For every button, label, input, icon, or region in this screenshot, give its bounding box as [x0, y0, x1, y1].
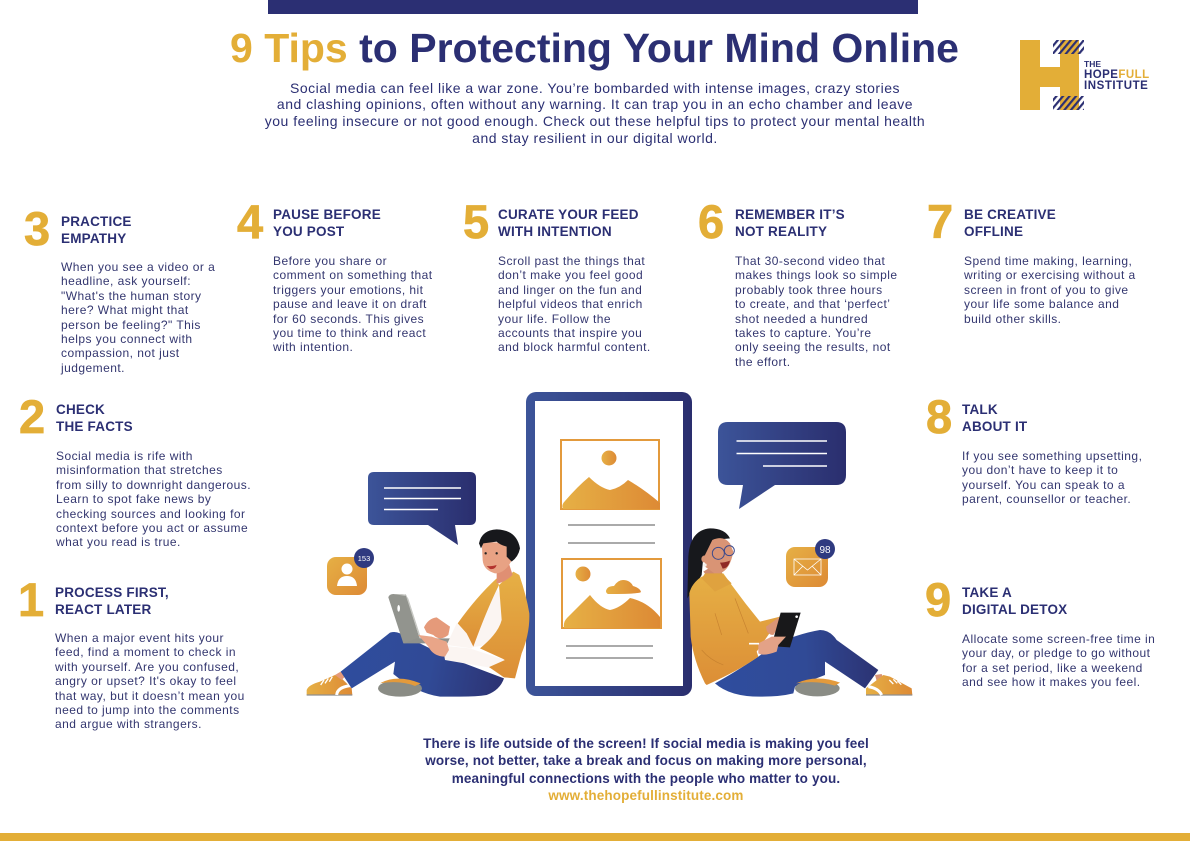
man with laptop — [307, 529, 529, 697]
heading 7 — [964, 207, 1056, 239]
logo: INSTITUTE — [1084, 80, 1148, 92]
heading 7: OFFLINE — [964, 224, 1023, 239]
body 8: yourself. You can speak to a — [962, 478, 1125, 492]
body 5: Scroll past the things that — [498, 254, 645, 268]
icon: profile notification — [327, 548, 374, 595]
bottom bar — [0, 833, 1190, 841]
body 1: need to jump into the comments — [55, 703, 240, 717]
heading 9 — [962, 585, 1067, 617]
number 5: 5 — [463, 195, 489, 248]
body 3: When you see a video or a — [61, 260, 215, 274]
heading 9: DIGITAL DETOX — [962, 602, 1067, 617]
body 6: the effort. — [735, 355, 791, 369]
body 3: helps you connect with — [61, 332, 193, 346]
body 7: build other skills. — [964, 312, 1061, 326]
heading 8: TALK — [962, 402, 998, 417]
body 5 — [498, 254, 651, 354]
closing message: worse, not better, take a break and focus on making more personal, — [425, 753, 867, 768]
heading 6: REMEMBER IT’S — [735, 207, 845, 222]
body 9: and see how it makes you feel. — [962, 675, 1141, 689]
heading 7: BE CREATIVE — [964, 207, 1056, 222]
logo: HOPEFULL — [1084, 69, 1150, 81]
body 2: from silly to downright dangerous. — [56, 478, 251, 492]
body 9: for a set period, like a weekend — [962, 661, 1143, 675]
number 1: 1 — [18, 573, 44, 626]
body 8: you don’t have to keep it to — [962, 463, 1118, 477]
body 2: misinformation that stretches — [56, 463, 223, 477]
body 5: don’t make you feel good — [498, 268, 643, 282]
body 1: feed, find a moment to check in — [55, 645, 236, 659]
number 3: 3 — [24, 202, 50, 255]
tip 7 — [927, 195, 1136, 326]
body 5: accounts that inspire you — [498, 326, 642, 340]
body 4: comment on something that — [273, 268, 433, 282]
body 3: here? What might that — [61, 303, 189, 317]
top bar — [268, 0, 918, 14]
number 4: 4 — [237, 195, 263, 248]
body 7: Spend time making, learning, — [964, 254, 1132, 268]
tip 4 — [237, 195, 433, 354]
body 1 — [55, 631, 245, 731]
tip 5 — [463, 195, 651, 354]
heading 8: ABOUT IT — [962, 419, 1027, 434]
heading 3 — [61, 214, 132, 246]
closing message — [423, 736, 869, 803]
heading 1: REACT LATER — [55, 602, 151, 617]
heading 4: PAUSE BEFORE — [273, 207, 381, 222]
body 6 — [735, 254, 897, 369]
body 6: to create, and that ‘perfect’ — [735, 297, 890, 311]
body 6: takes to capture. You’re — [735, 326, 871, 340]
heading 2: THE FACTS — [56, 419, 133, 434]
body 5: your life. Follow the — [498, 312, 611, 326]
body 2: Learn to spot fake news by — [56, 492, 211, 506]
logo: THE — [1084, 59, 1101, 69]
icon: profile notification: 153 — [358, 554, 370, 563]
intro text — [264, 80, 925, 146]
intro text: you feeling insecure or not good enough. Check out these helpful tips to protect your mental health — [265, 113, 925, 129]
body 1: angry or upset? It's okay to feel — [55, 674, 237, 688]
body 6: makes things look so simple — [735, 268, 897, 282]
number 7: 7 — [927, 195, 953, 248]
heading 5: WITH INTENTION — [498, 224, 612, 239]
heading 3: EMPATHY — [61, 231, 126, 246]
closing message: www.thehopefullinstitute.com — [548, 788, 744, 803]
heading 6: NOT REALITY — [735, 224, 827, 239]
tip 9 — [925, 573, 1155, 689]
body 3: "What's the human story — [61, 289, 202, 303]
tip 6 — [698, 195, 897, 369]
body 5: helpful videos that enrich — [498, 297, 643, 311]
text lines 1 — [568, 525, 655, 543]
picture card 2 — [562, 559, 661, 628]
body 3: person be feeling?" This — [61, 318, 201, 332]
heading 4: YOU POST — [273, 224, 344, 239]
body 6: shot needed a hundred — [735, 312, 868, 326]
text lines 2 — [566, 646, 653, 658]
body 3: judgement. — [61, 361, 125, 375]
body 2: checking sources and looking for — [56, 507, 246, 521]
closing message: meaningful connections with the people who matter to you. — [452, 771, 840, 786]
icon: mail notification — [786, 539, 835, 587]
heading 3: PRACTICE — [61, 214, 132, 229]
intro text: and stay resilient in our digital world. — [472, 130, 718, 146]
tip 1 — [18, 573, 245, 731]
icon: mail notification: 98 — [819, 545, 831, 556]
body 1: and argue with strangers. — [55, 717, 202, 731]
heading 4 — [273, 207, 381, 239]
phone — [526, 392, 692, 696]
body 2: context before you act or assume — [56, 521, 248, 535]
body 7: screen in front of you to give — [964, 283, 1129, 297]
title: 9 Tips to Protecting Your Mind Online — [230, 25, 959, 71]
body 1: that way, but it doesn’t mean you — [55, 689, 245, 703]
body 4: you time to think and react — [273, 326, 426, 340]
tip 2 — [19, 390, 251, 549]
intro text: Social media can feel like a war zone. You’re bombarded with intense images, crazy stories — [290, 80, 900, 96]
body 3 — [60, 260, 215, 375]
body 1: with yourself. Are you confused, — [55, 660, 239, 674]
speech bubble left — [368, 472, 476, 545]
heading 1 — [55, 585, 169, 617]
heading 9: TAKE A — [962, 585, 1012, 600]
heading 5 — [498, 207, 639, 239]
body 4: with intention. — [273, 340, 353, 354]
illustration: people and phone — [306, 392, 912, 697]
body 2: what you read is true. — [56, 535, 181, 549]
woman with tablet — [687, 528, 912, 697]
body 5: and block harmful content. — [498, 340, 651, 354]
number 9: 9 — [925, 573, 951, 626]
body 3: headline, ask yourself: — [61, 274, 191, 288]
body 6: only seeing the results, not — [735, 340, 891, 354]
body 8: If you see something upsetting, — [962, 449, 1142, 463]
body 8: parent, counsellor or teacher. — [962, 492, 1131, 506]
number 8: 8 — [926, 390, 952, 443]
body 2: Social media is rife with — [56, 449, 193, 463]
body 8 — [962, 449, 1142, 506]
body 9 — [962, 632, 1155, 689]
tip 8 — [926, 390, 1142, 506]
body 4: Before you share or — [273, 254, 387, 268]
logo — [1020, 40, 1150, 110]
heading 2 — [56, 402, 133, 434]
body 4 — [273, 254, 433, 354]
body 7: your life some balance and — [964, 297, 1119, 311]
body 6: probably took three hours — [735, 283, 883, 297]
body 4: for 60 seconds. This gives — [273, 312, 424, 326]
heading 8 — [962, 402, 1027, 434]
body 2 — [56, 449, 251, 549]
tip 3 — [24, 202, 215, 375]
speech bubble right — [718, 422, 846, 509]
closing message: There is life outside of the screen! If social media is making you feel — [423, 736, 869, 751]
body 6: That 30-second video that — [735, 254, 885, 268]
body 9: your day, or pledge to go without — [962, 646, 1150, 660]
number 2: 2 — [19, 390, 45, 443]
body 7 — [964, 254, 1136, 326]
body 7: writing or exercising without a — [964, 268, 1136, 282]
heading 1: PROCESS FIRST, — [55, 585, 169, 600]
number 6: 6 — [698, 195, 724, 248]
heading 6 — [735, 207, 845, 239]
heading 2: CHECK — [56, 402, 105, 417]
heading 5: CURATE YOUR FEED — [498, 207, 639, 222]
body 9: Allocate some screen-free time in — [962, 632, 1155, 646]
picture card 1 — [561, 440, 660, 509]
body 4: triggers your emotions, hit — [273, 283, 423, 297]
intro text: and clashing opinions, often without any warning. It can trap you in an echo chamber and leave — [277, 96, 913, 112]
body 3: compassion, not just — [61, 346, 180, 360]
body 4: pause and leave it on draft — [273, 297, 427, 311]
body 1: When a major event hits your — [55, 631, 224, 645]
body 5: and linger on the fun and — [498, 283, 642, 297]
